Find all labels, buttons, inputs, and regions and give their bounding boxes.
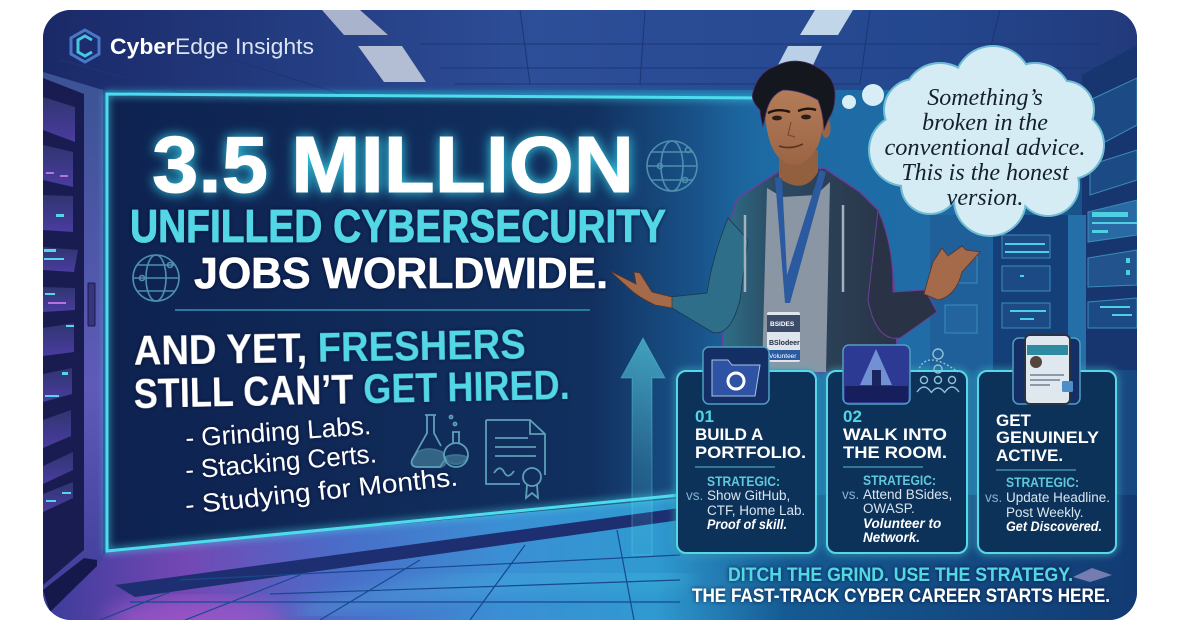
ear (822, 118, 830, 138)
card 2: walk into the room: Volunteer to (863, 516, 941, 531)
thought bubble: broken in the (922, 110, 1048, 136)
left server rack (43, 72, 103, 612)
left arm (670, 218, 748, 333)
right hand (924, 246, 980, 300)
card 2: walk into the room: vs. (842, 487, 859, 502)
card 3: get genuinely active: GENUINELY (996, 428, 1100, 447)
card 1: build a portfolio: Show GitHub, (707, 488, 790, 503)
globe icon right (647, 141, 697, 191)
card 3: get genuinely active: Get Discovered. (1006, 519, 1102, 534)
right arm (868, 210, 937, 338)
footer line: ditch the grind: DITCH THE GRIND. USE THE STRATEGY. (728, 564, 1073, 586)
card 2: walk into the room: Attend BSides, (863, 487, 952, 502)
card 3: get genuinely active (978, 335, 1116, 553)
badge: BSlodeer (769, 340, 800, 347)
card 1: build a portfolio (677, 347, 816, 553)
footer line: fast-track: THE FAST-TRACK CYBER CAREER STARTS HERE. (692, 585, 1110, 607)
card 1: build a portfolio: STRATEGIC: (707, 474, 780, 489)
card 1: build a portfolio: 01 (695, 407, 714, 426)
card 3: get genuinely active: vs. (985, 490, 1002, 505)
icon: github folder (703, 347, 769, 404)
card 1: build a portfolio: PORTFOLIO. (695, 443, 806, 462)
list: grind items: - Stacking Certs. (184, 438, 378, 485)
icon: audience (917, 349, 959, 393)
card 2: walk into the room: 02 (843, 407, 862, 426)
list: grind items: - Grinding Labs. (184, 410, 372, 453)
globe icon left (133, 255, 179, 301)
logo icon (71, 30, 99, 62)
card 1: build a portfolio: Proof of skill. (707, 517, 787, 532)
card 2: walk into the room (827, 345, 967, 553)
badge: Volunteer (769, 353, 797, 360)
icon: conference stage (843, 345, 910, 404)
card 1: build a portfolio: CTF, Home Lab. (707, 503, 805, 518)
card 1: build a portfolio: BUILD A (695, 425, 763, 444)
icon: certificate (486, 420, 545, 498)
subtitle: jobs worldwide: JOBS WORLDWIDE. (194, 249, 608, 298)
thought bubble: version. (947, 185, 1023, 211)
face (765, 86, 823, 165)
main headline panel (107, 94, 780, 551)
heading: still can't get hired: STILL CAN’T GET HIRED. (133, 361, 570, 417)
subtitle: unfilled cybersecurity: UNFILLED CYBERSECURITY (130, 200, 666, 252)
thought bubble dots (842, 84, 884, 109)
footer decoration (1073, 568, 1112, 582)
icon: lab flasks (412, 415, 468, 467)
card 2: walk into the room: Network. (863, 530, 920, 545)
title: 3.5 million: 3.5 MILLION (152, 120, 634, 209)
thought bubble: This is the honest (901, 160, 1070, 186)
card 3: get genuinely active: Post Weekly. (1006, 505, 1084, 520)
card 2: walk into the room: WALK INTO (843, 425, 947, 444)
card 3: get genuinely active: GET (996, 411, 1032, 430)
icon: phone with profile (1013, 335, 1080, 404)
card 2: walk into the room: STRATEGIC: (863, 473, 936, 488)
card 2: walk into the room: OWASP. (863, 501, 915, 516)
thought bubble: conventional advice. (884, 135, 1086, 161)
card 2: walk into the room: THE ROOM. (843, 443, 947, 462)
hoodie strings (745, 205, 843, 292)
logo wordmark: CyberEdge Insights (110, 34, 314, 59)
thought bubble (870, 47, 1103, 235)
lanyard (775, 170, 826, 303)
card 1: build a portfolio: vs. (686, 488, 703, 503)
thought bubble: Something’s (927, 85, 1043, 111)
list: grind items (186, 417, 456, 512)
card 3: get genuinely active: Update Headline. (1006, 490, 1110, 505)
right server racks (930, 45, 1137, 370)
heading: and yet freshers: AND YET, FRESHERS (133, 320, 526, 374)
card 3: get genuinely active: STRATEGIC: (1006, 475, 1079, 490)
card 3: get genuinely active: ACTIVE. (996, 446, 1063, 465)
left hand (610, 271, 672, 308)
hoodie body (722, 168, 898, 372)
badge: BSIDES (770, 321, 795, 328)
list: grind items: - Studying for Months. (183, 461, 459, 520)
neck (779, 150, 818, 186)
hair (752, 61, 835, 130)
upward arrow (621, 338, 665, 555)
eyes, nose, mouth (768, 109, 816, 148)
presenter figure (610, 61, 980, 372)
t-shirt (762, 182, 830, 372)
badge (767, 312, 800, 362)
